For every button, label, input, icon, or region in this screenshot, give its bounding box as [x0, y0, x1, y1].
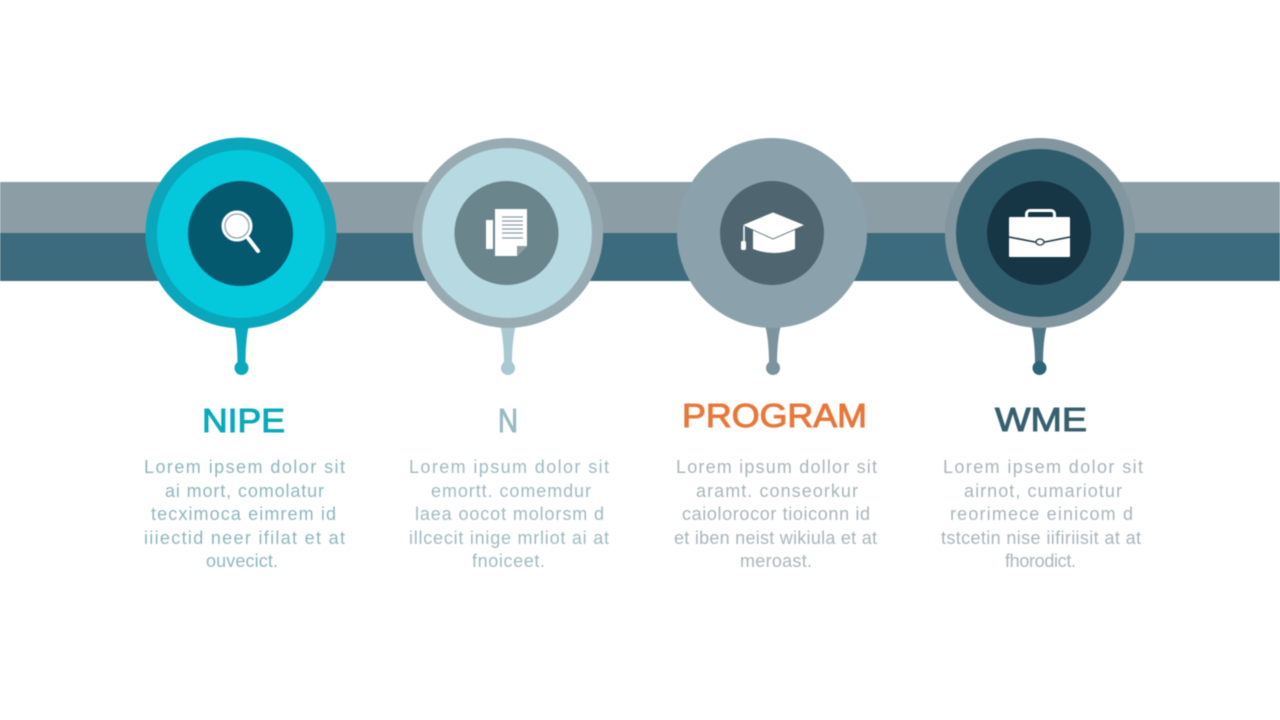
text block 1: ai mort, comolatur [165, 481, 324, 501]
pin stem and dot 3 [765, 325, 781, 375]
icon: document [486, 209, 527, 256]
heading: N: N [498, 402, 518, 439]
pin stem and dot 4 [1031, 325, 1047, 375]
text block 3: caiolorocor tioiconn id [682, 504, 870, 524]
text block 4: Lorem ipsem dolor sit [943, 457, 1143, 477]
text block 1: tecximoca eimrem id [151, 504, 336, 524]
icon: briefcase [1009, 210, 1070, 257]
text block 3: meroast. [740, 551, 812, 571]
icon: graduation cap [741, 212, 805, 253]
text block 2 [409, 457, 609, 571]
horizontal band [0, 182, 1280, 281]
heading: WME: WME [995, 401, 1087, 438]
panel: step 2 N [409, 138, 609, 571]
pin stem and dot 2 [500, 325, 516, 375]
text block 4: airnot, cumariotur [964, 481, 1122, 501]
text block 2: Lorem ipsum dolor sit [409, 457, 609, 477]
text block 2: fnoiceet. [472, 551, 545, 571]
panel: step 1 NIPE [144, 138, 345, 571]
text block 4: tstcetin nise iifiriisit at at [941, 528, 1141, 548]
text block 1: ouvecict. [206, 551, 278, 571]
circle 3 [677, 138, 867, 328]
circle 2 [413, 138, 603, 328]
text block 3 [674, 457, 877, 571]
panel: step 4 WME [941, 138, 1143, 571]
panel: step 3 PROGRAM [674, 138, 877, 571]
text block 4: reorimece einicom d [950, 504, 1133, 524]
circle 4 [945, 138, 1135, 328]
heading: PROGRAM: PROGRAM [682, 397, 867, 434]
text block 3: aramt. conseorkur [696, 481, 858, 501]
text block 3: Lorem ipsum dollor sit [676, 457, 877, 477]
text block 2: laea oocot molorsm d [415, 504, 604, 524]
text block 1: iiiectid neer ifilat et at [144, 528, 345, 548]
text block 4 [941, 457, 1143, 571]
text block 3: et iben neist wikiula et at [674, 528, 877, 548]
circle 1 [146, 138, 336, 328]
text block 2: illcecit inige mrliot ai at [409, 528, 609, 548]
pin stem and dot 1 [234, 325, 249, 375]
icon: magnifying glass [223, 212, 258, 251]
heading: NIPE: NIPE [202, 402, 285, 439]
text block 1 [144, 457, 345, 571]
text block 2: emortt. comemdur [431, 481, 591, 501]
text block 4: fhorodict. [1005, 551, 1076, 571]
text block 1: Lorem ipsem dolor sit [144, 457, 345, 477]
